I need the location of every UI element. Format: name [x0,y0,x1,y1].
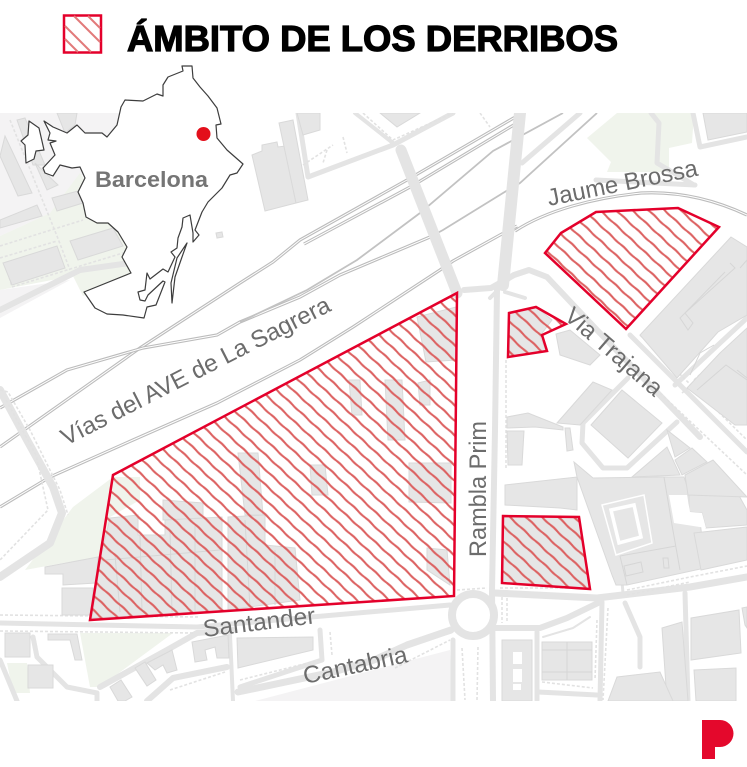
Barcelona label: Barcelona [95,167,209,192]
label: Vías del AVE de La Sagrera: Vías del AVE de La Sagrera [56,291,336,451]
legend swatch [64,16,101,52]
breakwater [171,243,187,303]
hatched area: Jaume Brossa block [545,208,719,329]
railway tracks [0,113,747,507]
location marker [196,127,210,141]
light urban tint areas [0,113,452,701]
sidewalks [0,113,747,700]
label: Santander: Santander [201,602,317,643]
roads [0,113,747,701]
logo [702,720,734,759]
buildings [0,113,747,701]
hatched area: lower block [502,516,590,589]
hatched area: large block [90,293,457,620]
hatched area: small block [508,307,566,357]
roundabout [452,594,494,636]
label: Cantabria: Cantabria [301,641,411,690]
enclave [21,121,44,163]
title: ÁMBITO DE LOS DERRIBOS [127,18,618,59]
label: Rambla Prim: Rambla Prim [465,421,492,557]
Barcelona outline [43,66,243,318]
label: Via Trajana: Via Trajana [559,302,669,402]
green areas [0,113,694,693]
locator map: Barcelona [21,66,243,318]
base map [0,113,747,701]
label: Jaume Brossa: Jaume Brossa [545,155,701,212]
